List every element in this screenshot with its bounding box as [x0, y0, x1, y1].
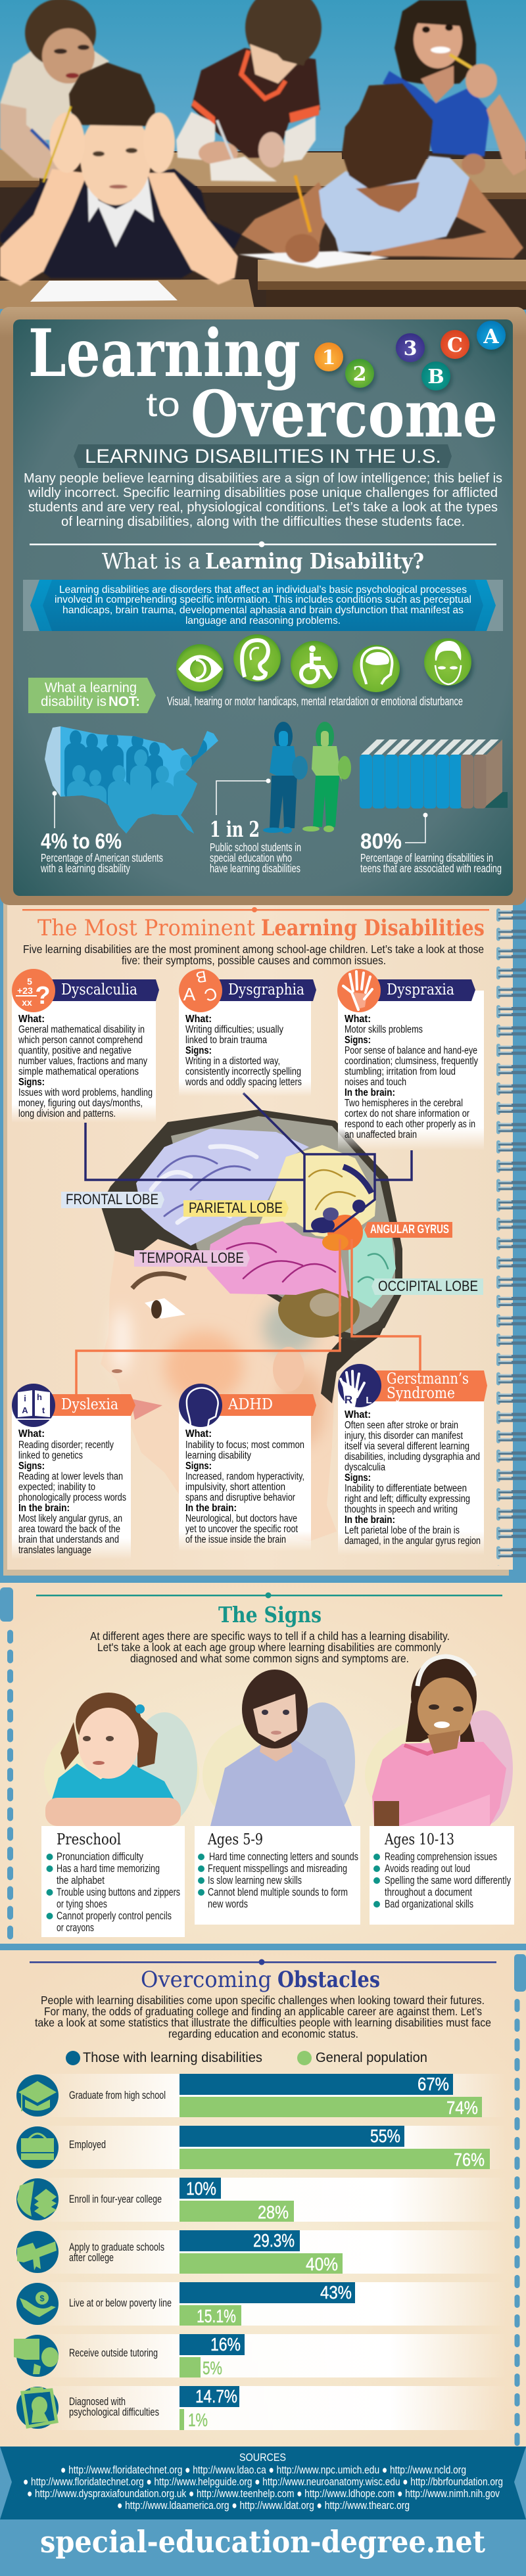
card: gerstmann's syndrome: disabilities, including dysgraphia and: [345, 1451, 480, 1463]
title: to: [146, 386, 180, 424]
card: dysgraphia: Signs:: [185, 1045, 212, 1056]
card: adhd: impulsivity, short attention: [185, 1482, 285, 1493]
row: enroll in four-year college: [16, 2178, 506, 2222]
stat: books 80%: [360, 739, 508, 875]
card: dysgraphia: Writing in a distorted way,: [185, 1056, 280, 1067]
us map with student silhouettes: [45, 726, 218, 833]
card: dysgraphia: consistently incorrectly spelling: [185, 1066, 301, 1077]
icon: math: xx: [22, 997, 32, 1008]
card: dyspraxia: In the brain:: [345, 1087, 395, 1098]
what a learning disability is not: [28, 634, 473, 713]
heading: At different ages there are specific ways to tell if a child has a learning disability.: [90, 1629, 450, 1643]
card: dyscalculia: Issues with word problems, handling: [18, 1087, 153, 1098]
card: dyslexia: linked to genetics: [18, 1450, 83, 1461]
student: girl in blue shirt: [383, 0, 526, 176]
section heading: most prominent: five: their symptoms, possible causes and common issues.: [122, 954, 386, 967]
child: boy 5-9: [203, 1670, 355, 1831]
icon: book: [12, 1384, 55, 1427]
card: dysgraphia: Writing difficulties; usually: [185, 1024, 283, 1035]
card: preschool: Cannot properly control pencils: [57, 1910, 172, 1922]
row: outside tutoring: [14, 2334, 506, 2378]
row: psychological difficulties: 14.7%: [195, 2386, 237, 2406]
icon: book: i: [24, 1393, 26, 1403]
icon: letters: C: [202, 983, 220, 1006]
card: gerstmann's syndrome: In the brain:: [345, 1514, 395, 1526]
icon: math: +23: [17, 985, 33, 996]
card: dyspraxia: noises and touch: [345, 1077, 406, 1088]
not tag: [28, 678, 156, 713]
card: dyspraxia: stumbling; irritation from loud: [345, 1066, 456, 1077]
heading: Obstacles: [277, 1967, 380, 1993]
icon: hands: R: [345, 1393, 352, 1406]
card: gerstmann's syndrome: [338, 1364, 487, 1555]
eye: [132, 1274, 186, 1319]
occipital lobe: [348, 1223, 396, 1308]
nostril: [112, 1369, 122, 1373]
row: graduate from high school: 74%: [446, 2097, 478, 2118]
legend: General population: [316, 2050, 427, 2065]
row: outside tutoring: Receive outside tutoring: [69, 2347, 158, 2359]
stat: students 1 in 2: special education who: [210, 851, 292, 864]
icon: eye: [176, 644, 226, 695]
label: frontal lobe: FRONTAL LOBE: [66, 1191, 158, 1207]
card: gerstmann's syndrome: Inability to differentiate between: [345, 1483, 467, 1494]
section heading: most prominent: Learning Disabilities: [261, 915, 485, 941]
heading: The Signs: [218, 1602, 322, 1628]
card: gerstmann's syndrome: Left parietal lobe of the brain is: [345, 1525, 460, 1536]
row: poverty line: Live at or below poverty line: [69, 2297, 172, 2309]
card: adhd: Inability to focus; most common: [185, 1440, 304, 1451]
card: dyslexia: Reading disorder; recently: [18, 1440, 114, 1451]
card: gerstmann's syndrome: What:: [345, 1409, 371, 1420]
label: temporal lobe: TEMPORAL LOBE: [139, 1250, 244, 1266]
label: angular gyrus: ANGULAR GYRUS: [370, 1223, 449, 1236]
title: Learning: [28, 316, 300, 392]
row: poverty line: 15.1%: [197, 2306, 236, 2326]
icon: math: [12, 969, 55, 1012]
card: dyslexia: In the brain:: [18, 1503, 70, 1514]
icon: hands: [338, 1364, 381, 1407]
label: occipital lobe: OCCIPITAL LOBE: [378, 1278, 478, 1294]
footer: sources: ● http://www.ldaamerica.org ● http://www.ldat.org ● http://www.thearc.org: [117, 2499, 410, 2512]
row: graduate from high school: [16, 2074, 506, 2118]
icon: tutoring book: [14, 2335, 59, 2377]
icon: wheelchair: [291, 641, 340, 692]
card: ages 5-9: new words: [208, 1898, 248, 1910]
intro paragraph: students and are very real, physiological conditions. Let’s take a look at the types: [28, 500, 498, 515]
card: gerstmann's syndrome: damaged, in the angular gyrus region: [345, 1535, 481, 1547]
angular gyrus highlight: [327, 1215, 363, 1250]
icon: letters: B: [195, 967, 208, 986]
row: psychological difficulties: psychological difficulties: [69, 2406, 159, 2418]
icon: money in hand: [16, 2283, 59, 2325]
card: dyslexia: translates language: [18, 1545, 91, 1556]
panel: the signs: [0, 1583, 526, 1944]
card: adhd: In the brain:: [185, 1503, 237, 1514]
card: dysgraphia: [179, 967, 316, 1096]
row: employed: Employed: [69, 2139, 106, 2151]
card: ages 5-9: Is slow learning new skills: [208, 1875, 302, 1886]
temporal lobe: [207, 1221, 348, 1298]
card: adhd: of the issue inside the brain: [185, 1534, 286, 1545]
card: dyspraxia: coordination; clumsiness, frequently: [345, 1056, 478, 1067]
parietal lobe: [260, 1145, 376, 1239]
stat: map 4% to 6%: [40, 723, 224, 875]
icon: book: t: [42, 1405, 45, 1415]
card: dyscalculia: Signs:: [18, 1077, 45, 1088]
face: [101, 1236, 368, 1541]
card: gerstmann's syndrome: right and left; difficulty expressing: [345, 1493, 470, 1505]
card: dyspraxia: Signs:: [345, 1035, 371, 1046]
notebook backdrop: [0, 894, 526, 1583]
section heading: most prominent: [22, 907, 489, 967]
row of books: [360, 739, 508, 808]
student figure: blue: [263, 722, 308, 833]
icon: clipboard: [16, 2387, 59, 2429]
student: boy in beige shirt: [0, 0, 109, 181]
card: adhd: Signs:: [185, 1461, 212, 1472]
card: dyscalculia: quantity, positive and negative: [18, 1045, 132, 1056]
card: dyspraxia: Two hemispheres in the cerebral: [345, 1098, 463, 1109]
ear: [273, 1347, 304, 1392]
intro paragraph: take a look at some statistics that illustrate the difficulties people with learning disabilities must face: [35, 2016, 491, 2029]
icon: stack of books: [16, 2178, 59, 2220]
card: dyslexia: What:: [18, 1428, 45, 1440]
stat: map 4% to 6%: Percentage of American students: [41, 851, 163, 864]
row: employed: [16, 2126, 506, 2170]
definition banner: Learning disabilities are disorders that affect an individual’s basic psychological processes: [59, 584, 467, 596]
card: gerstmann's syndrome: Syndrome: [387, 1385, 455, 1402]
cerebellum: [278, 1282, 360, 1338]
card: dyscalculia: number values, fractions and many: [18, 1056, 147, 1067]
card: adhd: learning disability: [185, 1450, 251, 1461]
colored letter balls: A: [483, 325, 499, 348]
card: dyspraxia: respond to each other properly as in: [345, 1119, 475, 1130]
frontal lobe: [136, 1129, 309, 1246]
stat: map 4% to 6%: with a learning disability: [40, 862, 130, 875]
orange connector lines: [76, 1239, 420, 1395]
card: ages 10-13: Avoids reading out loud: [385, 1863, 470, 1875]
card: dyscalculia: What:: [18, 1014, 45, 1025]
heading: what is a learning disability: [102, 548, 424, 574]
section heading: most prominent: The Most Prominent: [37, 915, 255, 941]
definition banner: language and reasoning problems.: [185, 615, 341, 626]
chalkboard panel: intro: [13, 316, 513, 896]
card: gerstmann's syndrome: itself via several different learning: [345, 1441, 469, 1452]
brain folds: [151, 1146, 388, 1292]
icon: diploma in hand: [16, 2231, 59, 2273]
footer: site url: special-education-degree.net: [40, 2524, 486, 2560]
child: preschool girl: [44, 1693, 199, 1831]
row: apply to graduate schools: Apply to graduate schools: [69, 2241, 164, 2253]
title: [28, 316, 498, 452]
colored letter balls: B: [427, 365, 444, 388]
icon: ear: [233, 634, 283, 686]
card: preschool: Has a hard time memorizing: [57, 1863, 160, 1875]
card: adhd: Neurological, but doctors have: [185, 1513, 297, 1524]
footer: sources: [0, 2447, 526, 2519]
card: preschool: Trouble using buttons and zippers: [57, 1886, 180, 1898]
row: psychological difficulties: [16, 2386, 506, 2430]
card: dysgraphia: What:: [185, 1014, 212, 1025]
card: preschool: or tying shoes: [57, 1898, 107, 1910]
colored letter balls: 3: [404, 337, 417, 360]
heading: [30, 1959, 496, 1993]
header illustration: students at desks: [0, 0, 526, 310]
back row desk: [0, 148, 526, 309]
card: dysgraphia: Dysgraphia: [228, 981, 304, 998]
front desks: [0, 260, 526, 310]
card: preschool: or crayons: [57, 1922, 94, 1934]
icon: brain in head: [352, 645, 402, 696]
student: boy in brown shirt: [176, 0, 322, 181]
card: dyslexia: area toward the back of the: [18, 1524, 120, 1535]
legend: Those with learning disabilities: [83, 2050, 262, 2065]
intro paragraph: of learning disabilities, along with the difficulties these students face.: [61, 514, 465, 529]
row: psychological difficulties: 1%: [188, 2410, 208, 2430]
intro paragraph: For many, the odds of graduating college and finding an applicable career are against them. Let’s: [44, 2005, 482, 2018]
icon: hand: [337, 969, 381, 1012]
card: ages 5-9: Ages 5-9: [207, 1831, 263, 1848]
icon: graduation cap: [16, 2074, 59, 2117]
card: gerstmann's syndrome: injury, this disorder can manifest: [345, 1430, 464, 1441]
navy connector lines: [85, 1093, 412, 1180]
card: ages 10-13: throughout a document: [385, 1886, 472, 1898]
card: dyscalculia: simple mathematical operations: [18, 1066, 139, 1077]
row: enroll in four-year college: Enroll in four-year college: [69, 2193, 162, 2205]
child: girl 10-13: [365, 1656, 513, 1831]
card: ages 10-13: [370, 1826, 514, 1925]
card: adhd: Increased, random hyperactivity,: [185, 1471, 304, 1482]
icon: money in hand: $: [39, 2293, 45, 2303]
card: dyspraxia: Dyspraxia: [387, 981, 454, 998]
cheek and neck shading: [112, 1301, 325, 1446]
card: dyslexia: Signs:: [18, 1461, 45, 1472]
card: dyslexia: brain that understands and: [18, 1534, 119, 1545]
card: preschool: Pronunciation difficulty: [57, 1851, 144, 1863]
card: dyspraxia: [337, 969, 484, 1150]
row: poverty line: 43%: [320, 2282, 352, 2303]
colored letter balls: 2: [353, 363, 366, 386]
icon: math: 5: [27, 976, 32, 987]
row: employed: 55%: [370, 2126, 400, 2146]
chalkboard frame: [0, 307, 526, 905]
heading: what is a learning disability: Learning Disability?: [205, 548, 424, 574]
row: outside tutoring: 16%: [210, 2334, 241, 2354]
card: ages 5-9: Cannot blend multiple sounds to form: [208, 1886, 348, 1898]
card: dyslexia: phonologically process words: [18, 1492, 126, 1503]
stat: students 1 in 2: have learning disabilities: [210, 862, 300, 875]
icon: math: ?: [35, 982, 51, 1010]
card: dyspraxia: an unaffected brain: [345, 1129, 417, 1140]
intro paragraph: regarding education and economic status.: [168, 2027, 358, 2040]
card: gerstmann's syndrome: thoughts in speech and writing: [345, 1504, 458, 1515]
not tag: disability is: [41, 694, 107, 709]
colored letter balls: [314, 321, 508, 394]
stat: students 1 in 2: 1 in 2: [210, 816, 260, 842]
student: boy with head in hands: [0, 62, 241, 286]
icon: hands: L: [366, 1395, 372, 1406]
card: ages 10-13: Bad organizational skills: [385, 1898, 473, 1910]
row: enroll in four-year college: 28%: [258, 2202, 289, 2222]
back of hair: [321, 1318, 388, 1403]
icon: head: [179, 1384, 222, 1428]
student figure: green: [302, 722, 351, 832]
heading: what is a learning disability: What is a: [102, 548, 201, 574]
card: preschool: Preschool: [57, 1831, 121, 1848]
card: dyslexia: Reading at lower levels than: [18, 1471, 123, 1482]
stat: map 4% to 6%: 4% to 6%: [41, 829, 122, 853]
icon: briefcase: [16, 2126, 59, 2168]
card: ages 5-9: [195, 1826, 360, 1925]
footer: sources: SOURCES: [239, 2451, 286, 2464]
skull and hair: [101, 1110, 402, 1341]
panel: overcoming obstacles: [0, 1944, 526, 2447]
card: adhd: yet to uncover the specific root: [185, 1524, 299, 1535]
section heading: most prominent: Five learning disabilities are the most prominent among school-age children. Let’s take a look at those: [23, 943, 484, 956]
card: gerstmann's syndrome: Gerstmann’s: [387, 1370, 469, 1388]
row: outside tutoring: 5%: [203, 2358, 222, 2378]
definition banner: [23, 580, 503, 631]
colored letter balls: C: [447, 334, 463, 357]
subtitle ribbon: LEARNING DISABILITIES IN THE U.S.: [85, 446, 441, 467]
lips: [131, 1399, 162, 1420]
card: dyslexia: expected; inability to: [18, 1482, 95, 1493]
card: dyscalculia: General mathematical disability in: [18, 1024, 145, 1035]
card: ages 5-9: Hard time connecting letters and sounds: [209, 1851, 358, 1863]
heading: Overcoming: [141, 1967, 272, 1993]
row: graduate from high school: 67%: [418, 2074, 449, 2094]
card: dyspraxia: Motor skills problems: [345, 1024, 423, 1035]
intro paragraph: wildly incorrect. Specific learning disabilities pose unique challenges for afflicted: [28, 485, 498, 500]
card: dyslexia: [12, 1384, 135, 1560]
card: dyscalculia: Dyscalculia: [61, 981, 137, 998]
card: dyscalculia: money, figuring out days/months,: [18, 1098, 143, 1109]
label: angular gyrus: [364, 1222, 452, 1238]
row: enroll in four-year college: 10%: [186, 2178, 216, 2199]
student: girl writing: [239, 83, 523, 268]
card: ages 5-9: Frequent misspellings and misreading: [208, 1863, 347, 1875]
row: apply to graduate schools: 29.3%: [253, 2230, 295, 2251]
colored letter balls: 1: [322, 346, 335, 369]
icon: face: [424, 638, 473, 690]
legend: [66, 2050, 427, 2065]
icon: book: A: [22, 1405, 28, 1415]
skull inner rim: [171, 1116, 395, 1334]
card: dyscalculia: [12, 969, 159, 1123]
card: dysgraphia: linked to brain trauma: [185, 1035, 267, 1046]
not tag: NOT:: [108, 694, 140, 709]
stat: students 1 in 2: Public school students in: [210, 841, 301, 854]
stat: students 1 in 2: [210, 722, 351, 875]
heading: diagnosed and what some common signs and symptoms are.: [130, 1652, 409, 1665]
card: gerstmann's syndrome: Often seen after stroke or brain: [345, 1420, 458, 1431]
not tag: What a learning: [45, 680, 137, 695]
icon: letters: A: [183, 984, 196, 1004]
stat: books 80%: 80%: [360, 829, 402, 853]
card: dyslexia: Most likely angular gyrus, an: [18, 1513, 122, 1524]
card: preschool: [41, 1826, 185, 1937]
card: adhd: [179, 1384, 316, 1551]
card: adhd: What:: [185, 1428, 212, 1440]
gyrus callout box with blobs: [304, 1154, 375, 1233]
heading: [36, 1592, 502, 1665]
heading: Let's take a look at each age group where learning disabilities are commonly: [97, 1641, 441, 1654]
row: graduate from high school: Graduate from high school: [69, 2090, 166, 2101]
card: dyspraxia: What:: [345, 1014, 371, 1025]
card: dyslexia: Dyslexia: [61, 1396, 118, 1413]
row: apply to graduate schools: [16, 2230, 506, 2274]
card: dysgraphia: words and oddly spacing letters: [185, 1077, 302, 1088]
row: poverty line: [16, 2282, 506, 2326]
card: dyspraxia: cortex do not share information or: [345, 1108, 469, 1119]
definition banner: involved in comprehending specific information. This includes conditions such as perceptual: [55, 594, 471, 605]
row: apply to graduate schools: 40%: [306, 2254, 338, 2274]
card: dyscalculia: long division and patterns.: [18, 1108, 116, 1119]
footer: site url: [0, 2519, 526, 2576]
row: psychological difficulties: Diagnosed with: [69, 2396, 126, 2408]
card: gerstmann's syndrome: Signs:: [345, 1472, 371, 1484]
icon: book: h: [37, 1392, 42, 1402]
intro paragraph: Many people believe learning disabilities are a sign of low intelligence; this belief is: [24, 471, 502, 486]
card: gerstmann's syndrome: dyscalculia: [345, 1462, 385, 1473]
icon: letters: [179, 967, 222, 1012]
row: apply to graduate schools: after college: [69, 2252, 114, 2264]
panel: brain illustration: [61, 1093, 483, 1541]
definition banner: handicaps, brain trauma, developmental aphasia and brain dysfunction that manifest as: [62, 605, 464, 616]
card: dyspraxia: Poor sense of balance and hand-eye: [345, 1045, 477, 1056]
card: preschool: the alphabet: [57, 1875, 105, 1886]
intro paragraph: [24, 471, 502, 529]
card: ages 10-13: Ages 10-13: [384, 1831, 454, 1848]
intro paragraph: People with learning disabilities come upon specific challenges when looking toward their futures.: [41, 1994, 485, 2007]
intro paragraph: [35, 1994, 491, 2040]
label: parietal lobe: PARIETAL LOBE: [189, 1200, 283, 1216]
card: adhd: ADHD: [227, 1396, 273, 1413]
row: employed: 76%: [454, 2149, 485, 2170]
card: adhd: spans and disruptive behavior: [185, 1492, 295, 1503]
card: dyscalculia: which person cannot comprehend: [18, 1035, 143, 1046]
